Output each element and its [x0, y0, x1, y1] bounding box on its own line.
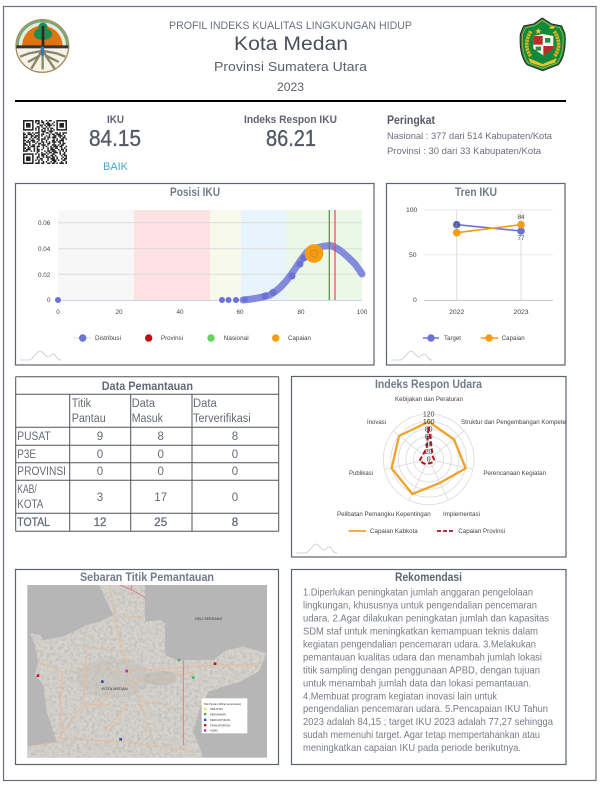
header: title block: PROFIL INDEKS KUALITAS LINGKUNGAN HIDUP: [169, 20, 412, 32]
map: PEMUKIMAN: [210, 712, 226, 716]
table rows: 17: [154, 492, 167, 504]
heading: Sebaran Titik Pemantauan: Sebaran Titik Pemantauan: [80, 570, 214, 584]
table rows: [17, 431, 238, 529]
watermark icon: [296, 544, 337, 553]
table header: Terverifikasi: [193, 413, 251, 425]
distribution chart: 0.04: [38, 246, 51, 253]
table rows: 9: [97, 431, 103, 443]
KPI: IKU: IKU: [107, 114, 124, 126]
map: AQMS: [210, 729, 218, 733]
icon: Kota Medan shield: [520, 18, 565, 71]
distribution chart: 0.06: [38, 220, 51, 227]
legend: Indeks Respon Udara: Capaian Kabkota: [370, 528, 418, 535]
table header: Data: [193, 398, 217, 410]
heading: Tren IKU: Tren IKU: [455, 185, 497, 199]
map: TRANSPORTASI: [210, 723, 231, 727]
recommendation text: lingkungan, khususnya untuk pengendalian pencemaran: [303, 600, 537, 612]
line chart: 100: [406, 207, 418, 214]
header: title block: Kota Medan: [234, 34, 348, 55]
legend: Tren IKU: Capaian: [502, 335, 525, 342]
radar chart: 40: [425, 442, 433, 449]
legend: Posisi IKU: Capaian: [288, 335, 311, 342]
distribution chart: 0: [56, 309, 60, 316]
recommendation text: SDM staf untuk meningkatkan kemampuan teknis dalam: [303, 625, 538, 637]
heading: Rekomendasi: Rekomendasi: [395, 570, 462, 584]
radar chart: Inovasi: [367, 419, 386, 426]
table rows: P3E: [17, 449, 36, 461]
icon: QR code: [23, 120, 67, 164]
table rows: 3: [97, 492, 103, 504]
recommendation text: 1.Diperlukan peningkatan jumlah anggaran pengelolaan: [303, 586, 533, 598]
ranking block: Peringkat: [387, 113, 435, 127]
header: title block: [169, 20, 412, 94]
KPI: IKU: 84.15: [89, 125, 141, 151]
KPI: Indeks Respon IKU: 86.21: [266, 125, 316, 151]
watermark icon: [391, 351, 432, 360]
radar chart: 80: [425, 426, 433, 433]
table rows: 12: [94, 517, 106, 529]
table rows: 0: [232, 449, 238, 461]
table header: [72, 398, 251, 425]
table rows: PROVINSI: [17, 466, 66, 478]
radar chart: [337, 396, 566, 518]
map: [27, 585, 267, 758]
panel: Sebaran Titik Pemantauan: [16, 570, 278, 764]
table header: Data: [132, 398, 156, 410]
recommendation text: sudah memenuhi target. Agar tetap mempertahankan atau: [303, 729, 540, 741]
distribution chart: 40: [176, 309, 184, 316]
recommendation text: [303, 586, 553, 754]
ranking block: Nasional : 377 dari 514 Kabupaten/Kota: [387, 131, 553, 142]
legend: Indeks Respon Udara: [349, 528, 505, 535]
header: title block: Provinsi Sumatera Utara: [214, 60, 367, 74]
line chart: 2023: [513, 309, 529, 316]
heading: Posisi IKU: Posisi IKU: [170, 185, 220, 199]
map: KOTA MEDAN: [102, 687, 128, 691]
table header: Masuk: [132, 413, 163, 425]
distribution chart: 100: [357, 309, 368, 316]
distribution chart: 80: [297, 309, 305, 316]
radar chart: Publikasi: [349, 470, 373, 477]
table rows: KAB/: [17, 484, 37, 496]
table rows: 0: [97, 449, 103, 461]
watermark icon: [20, 351, 61, 360]
table rows: 8: [157, 431, 164, 443]
table rows: 0: [232, 492, 238, 504]
line chart: 77: [517, 235, 525, 242]
header rule: [15, 100, 566, 102]
radar chart: Implementasi: [443, 511, 480, 518]
panel: Tren IKU: [386, 184, 565, 365]
ranking block: [387, 113, 553, 157]
KPI: IKU: [89, 114, 141, 173]
panel: Indeks Respon Udara: [292, 376, 566, 557]
recommendation text: udara. 2.Agar dilakukan peningkatan jumlah dan kapasitas: [303, 612, 549, 624]
radar chart: 60: [425, 434, 433, 441]
legend: Tren IKU: Target: [444, 335, 461, 342]
recommendation text: pemantauan kualitas udara dan menambah jumlah lokasi: [303, 651, 542, 663]
radar chart: Kebijakan dan Peraturan: [395, 396, 463, 403]
line chart: 75: [453, 222, 461, 229]
table rows: TOTAL: [17, 517, 51, 529]
KPI: Indeks Respon IKU: Indeks Respon IKU: [244, 114, 337, 126]
map: Titik Pantau (dilihat peruntukan) :: [204, 702, 243, 706]
line chart: 2022: [449, 309, 464, 316]
legend: Posisi IKU: Provinsi: [161, 335, 183, 342]
table rows: 0: [157, 449, 164, 461]
map: DELI SERDANG: [195, 617, 223, 621]
table rows: 0: [157, 466, 164, 478]
radar chart: 20: [425, 449, 433, 456]
recommendation text: pengendalian pencemaran udara. 5.Pencapaian IKU Tahun: [303, 703, 548, 715]
KPI: IKU: BAIK: [103, 161, 129, 173]
recommendation text: meningkatkan capaian IKU pada periode berikutnya.: [303, 742, 521, 754]
header: title block: 2023: [277, 80, 304, 94]
panel: Data Pemantauan table: [16, 377, 279, 531]
legend: Tren IKU: [423, 334, 525, 342]
legend: Posisi IKU: [74, 334, 311, 342]
recommendation text: 4.Membuat program kegiatan inovasi lain untuk: [303, 690, 498, 702]
legend: Posisi IKU: Distribusi: [95, 335, 121, 342]
recommendation text: kegiatan pengendalian pencemaran udara. 3.Melakukan: [303, 638, 536, 650]
recommendation text: 2023 adalah 84,15 ; target IKU 2023 adalah 77,27 sehingga: [303, 716, 553, 728]
table rows: KOTA: [17, 499, 44, 511]
panel: Posisi IKU: [16, 184, 374, 365]
line chart: 0: [413, 297, 417, 304]
map: INDUSTRI: [210, 707, 223, 711]
table rows: 25: [154, 517, 167, 529]
distribution chart: 60: [236, 309, 244, 316]
table rows: 8: [232, 517, 238, 529]
recommendation text: titik sampling dengan penggunaan APBD, dengan tujuan: [303, 664, 540, 676]
distribution chart: 20: [115, 309, 123, 316]
panel: Rekomendasi: [292, 570, 566, 764]
line chart: 84: [517, 214, 525, 221]
icon: KLHK logo: [16, 20, 69, 72]
legend: Indeks Respon Udara: Capaian Provinsi: [458, 528, 505, 535]
legend: Posisi IKU: Nasional: [224, 335, 249, 342]
line chart: 50: [409, 252, 417, 259]
map: PERKANTORAN: [210, 718, 230, 722]
radar chart: Perencanaan Kegiatan: [483, 470, 546, 477]
radar chart: 0: [427, 457, 431, 464]
distribution chart: 0: [47, 297, 51, 304]
distribution chart: 0.02: [38, 272, 51, 279]
line chart: [406, 207, 553, 316]
table rows: 0: [97, 466, 103, 478]
table header: Pantau: [72, 413, 106, 425]
distribution chart: [38, 210, 368, 316]
heading: Data Pemantauan: Data Pemantauan: [102, 381, 193, 393]
radar chart: Pelibatan Pemangku Kepentingan: [337, 511, 431, 518]
radar chart: 100: [423, 419, 435, 426]
table rows: PUSAT: [17, 431, 51, 443]
radar chart: 120: [423, 411, 435, 418]
KPI: Indeks Respon IKU: [244, 114, 337, 151]
table header: Titik: [72, 398, 91, 410]
ranking block: Provinsi : 30 dari 33 Kabupaten/Kota: [387, 146, 542, 157]
heading: Indeks Respon Udara: Indeks Respon Udara: [375, 377, 482, 391]
recommendation text: untuk menambah jumlah data dan lokasi pemantauan.: [303, 677, 531, 689]
radar chart: Struktur dan Pengembangan Kompete: [461, 419, 566, 426]
table rows: 0: [232, 466, 238, 478]
table rows: 8: [232, 431, 238, 443]
